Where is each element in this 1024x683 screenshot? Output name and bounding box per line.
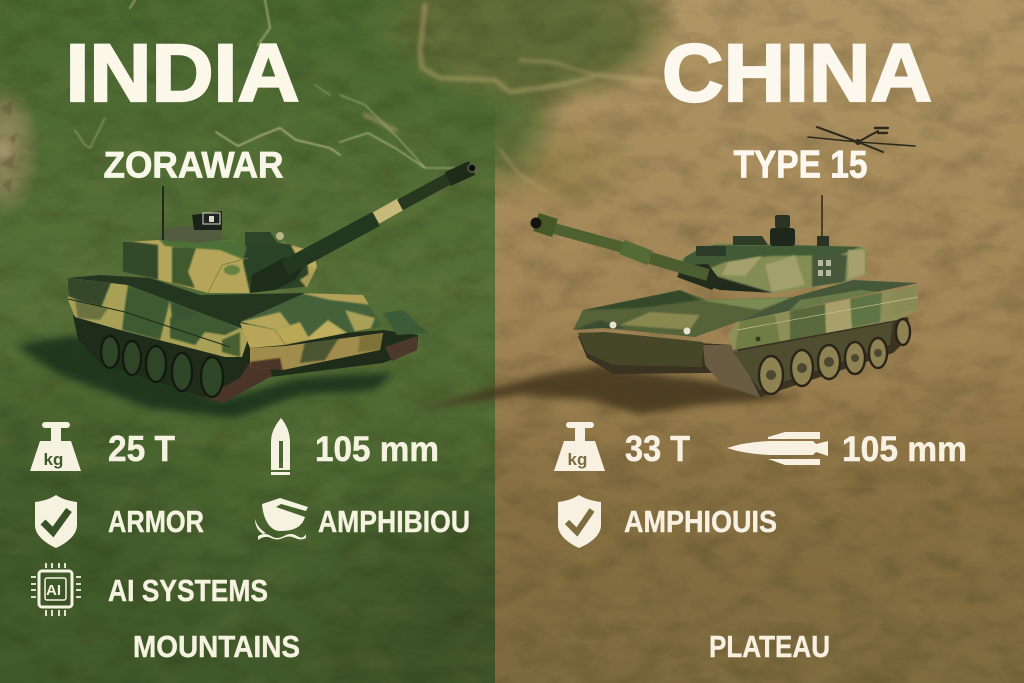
spec row: China weight: [554, 422, 690, 471]
value: 25 T: 25 T: [108, 428, 175, 469]
icon: weight: kg: [568, 450, 587, 469]
label: AMPHIOUIS: AMPHIOUIS: [624, 504, 777, 539]
heading: CHINA: CHINA: [662, 28, 932, 119]
turret: [677, 195, 865, 293]
main gun barrel and mantlet: [250, 164, 476, 293]
label: MOUNTAINS: MOUNTAINS: [133, 629, 300, 664]
icon: weight: [30, 422, 81, 471]
tracks and wheels: [578, 317, 910, 397]
hull glacis plate: [240, 323, 285, 348]
value: 105 mm: 105 mm: [315, 430, 439, 469]
spec row: India weight: [30, 422, 175, 471]
icon: boat: [255, 498, 308, 540]
spec row: India gun: [271, 418, 439, 475]
spec row: India AI: [31, 563, 268, 616]
icon: missile: [727, 432, 828, 465]
icon: weight: kg: [44, 450, 63, 469]
lower front hull: [578, 332, 703, 367]
turret: [120, 186, 318, 293]
hull glacis: [573, 290, 793, 337]
spec row: India amphibious: [255, 498, 470, 540]
spec row: India armor: [35, 495, 204, 548]
icon: shield: [35, 495, 77, 548]
main gun barrel and mantlet: [530, 218, 720, 290]
spec row: China amphibious: [558, 495, 777, 548]
label: PLATEAU: PLATEAU: [709, 629, 830, 664]
tank: Type 15: [405, 195, 918, 415]
value: 33 T: 33 T: [625, 428, 690, 469]
icon: drone: [808, 127, 915, 152]
value: 105 mm: 105 mm: [842, 430, 967, 469]
label: AI SYSTEMS: AI SYSTEMS: [108, 573, 268, 608]
tank: Zorawar: [15, 164, 476, 418]
right fender: [383, 310, 428, 335]
hull side plate: [66, 276, 250, 357]
hull side armor: [728, 285, 918, 350]
label: AMPHIBIOU: AMPHIBIOU: [318, 504, 470, 539]
subheading: TYPE 15: TYPE 15: [734, 144, 868, 186]
icon: AI chip: [31, 563, 81, 616]
hull deck: [240, 293, 382, 345]
icon: shell: [271, 418, 290, 475]
icon: shield: [558, 495, 601, 548]
subheading: ZORAWAR: ZORAWAR: [104, 144, 284, 186]
heading: INDIA: INDIA: [66, 28, 300, 119]
label: ARMOR: ARMOR: [108, 504, 204, 539]
tracks and wheels: [73, 315, 418, 403]
spec row: China gun: [727, 430, 967, 469]
hull deck rear: [68, 275, 305, 328]
hull rear deck: [737, 280, 918, 322]
hull front lower: [250, 333, 383, 372]
icon: AI chip: AI: [46, 582, 61, 599]
